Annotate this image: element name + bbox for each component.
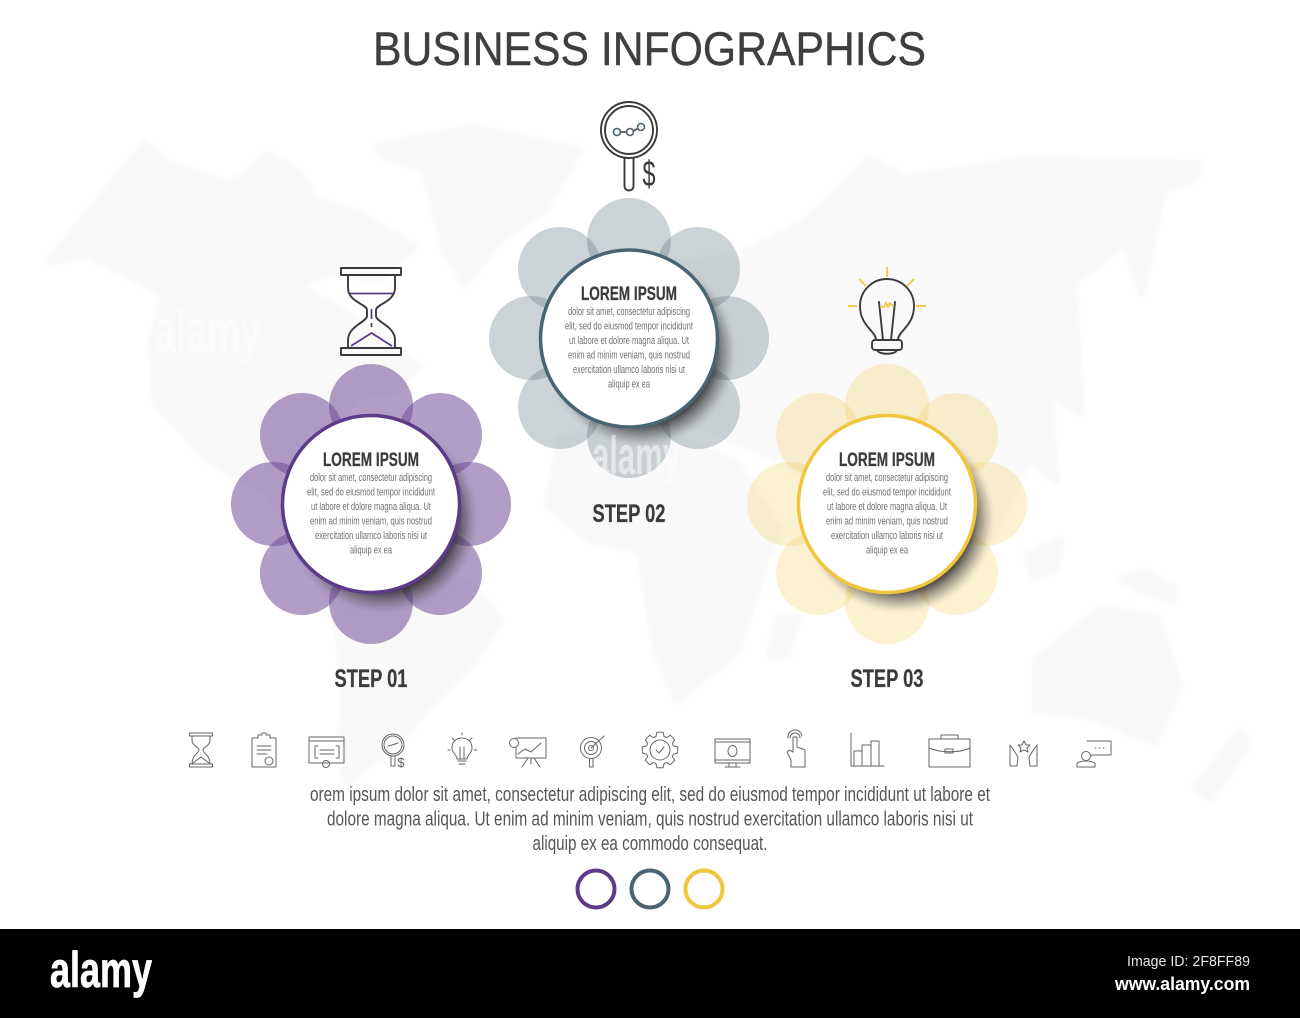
small icon: person with speech bubble (1077, 741, 1111, 767)
panel: step 02 flower (489, 198, 769, 486)
petals purple (231, 364, 511, 644)
small icon: clipboard (252, 733, 276, 767)
panel: step 01 flower (231, 364, 511, 644)
small icon: magnifier (382, 734, 405, 770)
petals teal (489, 198, 769, 478)
footer bar (0, 929, 1300, 1018)
description text block: orem ipsum dolor sit amet, consectetur adipiscing elit, sed do eiusmod tempor incididunt ut labore et (310, 784, 990, 806)
description text block: aliquip ex ea commodo consequat. (532, 833, 768, 855)
main circle (798, 416, 976, 592)
main circle (282, 416, 460, 592)
icon: magnifier with dollar: $ (642, 153, 656, 194)
faint watermark on map: alamy (155, 297, 261, 366)
small icon: gear (642, 732, 678, 768)
circle text (823, 450, 951, 556)
circle text: LOREM IPSUM (581, 284, 677, 305)
circle text: aliquip ex ea (350, 544, 393, 556)
circle text: enim ad minim veniam, quis nostrud (568, 350, 690, 362)
circle text (565, 284, 693, 390)
small icon: magnifier: $ (397, 755, 405, 770)
colour legend rings (578, 870, 722, 908)
circle text: elit, sed do eiusmod tempor incididunt (565, 320, 693, 332)
petals yellow (747, 364, 1027, 644)
small icon: target (580, 736, 604, 767)
circle text: LOREM IPSUM (839, 450, 935, 471)
circle text: aliquip ex ea (608, 378, 651, 390)
shadow (289, 424, 477, 612)
small icon: monitor with money bag (715, 739, 750, 767)
shadow (547, 258, 735, 446)
circle text: enim ad minim veniam, quis nostrud (310, 516, 432, 528)
circle text (307, 450, 435, 556)
icon: hourglass (341, 268, 401, 355)
shadow (805, 424, 993, 612)
small icon: bulb (448, 733, 477, 764)
icon: magnifier with dollar (601, 102, 657, 194)
circle text: LOREM IPSUM (323, 450, 419, 471)
footer image id: Image ID: 2F8FF89 (1127, 953, 1250, 970)
circle text: exercitation ullamco laboris nisi ut (315, 530, 427, 542)
world map background (48, 128, 1248, 798)
footer url: www.alamy.com (1114, 974, 1250, 994)
circle text: enim ad minim veniam, quis nostrud (826, 516, 948, 528)
small icon: hands with star (1010, 741, 1037, 766)
circle text: aliquip ex ea (866, 544, 909, 556)
title: BUSINESS INFOGRAPHICS (373, 22, 926, 75)
small icon: code window (309, 737, 344, 768)
circle text: ut labore et dolore magna aliqua. Ut (827, 501, 947, 513)
small icon: bar chart (851, 733, 884, 766)
panel: step 03 flower (747, 364, 1027, 644)
circle text: dolor sit amet, consectetur adipiscing (310, 472, 432, 484)
main circle (540, 250, 718, 427)
step 01 label: STEP 01 (334, 665, 408, 693)
icon row (190, 730, 1111, 770)
circle text: dolor sit amet, consectetur adipiscing (826, 472, 948, 484)
small icon: presentation board (510, 738, 546, 767)
circle text: exercitation ullamco laboris nisi ut (831, 530, 943, 542)
circle text: dolor sit amet, consectetur adipiscing (568, 306, 690, 318)
description text block: dolore magna aliqua. Ut enim ad minim veniam, quis nostrud exercitation ullamco laboris nisi ut (327, 808, 973, 830)
circle text: elit, sed do eiusmod tempor incididunt (307, 486, 435, 498)
circle text: exercitation ullamco laboris nisi ut (573, 364, 685, 376)
icon: light bulb (848, 267, 926, 354)
circle text: ut labore et dolore magna aliqua. Ut (311, 501, 431, 513)
description text block (310, 784, 990, 855)
small icon: hourglass (190, 733, 212, 767)
circle text: elit, sed do eiusmod tempor incididunt (823, 486, 951, 498)
step 02 label: STEP 02 (592, 500, 666, 528)
circle text: ut labore et dolore magna aliqua. Ut (569, 335, 689, 347)
watermark on petal: alamy (592, 426, 680, 486)
step 03 label: STEP 03 (850, 665, 924, 693)
small icon: touch hand (787, 730, 805, 767)
small icon: briefcase (929, 735, 970, 767)
footer logo: alamy (50, 942, 152, 998)
